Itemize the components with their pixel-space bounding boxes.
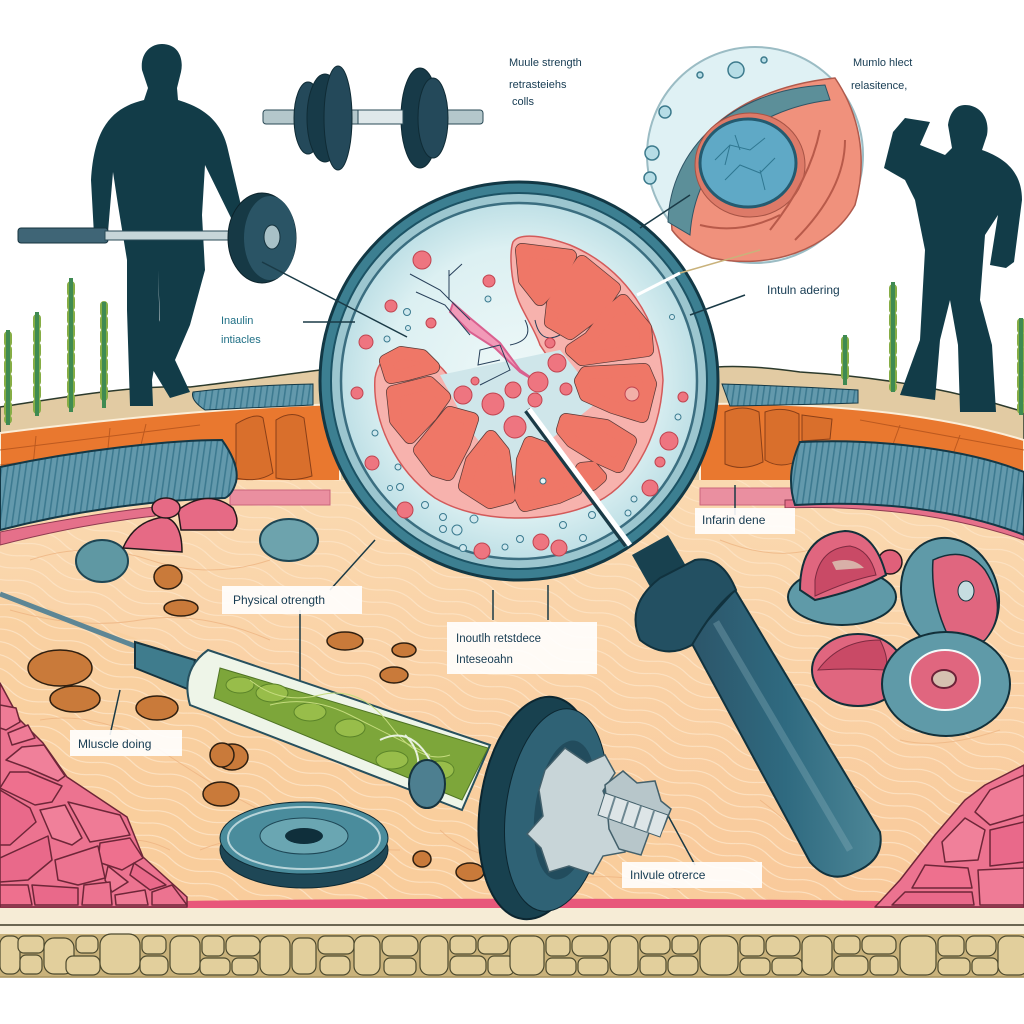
label: Insulin adaring: Intuln adering — [767, 283, 840, 297]
magnifying glass — [320, 182, 718, 580]
label: Muscle blast resistance: Mumlo hlect — [853, 57, 912, 69]
blue-gray fibre bundle left — [0, 384, 313, 530]
label: Physical strength — [222, 586, 362, 614]
kidney section — [375, 236, 663, 518]
label: Muscle blast resistance — [851, 57, 912, 92]
stone strip — [0, 908, 1024, 978]
dumbbell — [263, 66, 483, 170]
layered tissue background — [0, 366, 1024, 920]
barbell — [18, 193, 296, 283]
label: Insulin resistance — [447, 622, 597, 674]
grass stalks — [8, 278, 1021, 425]
label: Insulin intoacles: Inaulin — [221, 315, 253, 327]
label: Insulin resistance: Inteseoahn — [456, 654, 513, 666]
rings right — [788, 525, 1014, 736]
label: Muscle strength: retrasteiehs — [509, 79, 567, 91]
syringe — [0, 594, 490, 810]
leader lines — [110, 195, 760, 865]
orange fibre bundles — [236, 408, 832, 480]
label: Insulin dens — [695, 508, 795, 534]
label: Muscle strength: colls — [512, 96, 535, 108]
vein network — [410, 264, 560, 385]
label: Insulin stress — [622, 862, 762, 888]
silhouette: flexing man — [884, 105, 1022, 412]
label: Physical strength: Physical otrength — [233, 593, 325, 607]
label: Insulin dens: Infarin dene — [702, 513, 766, 527]
label: Insulin stress: Inlvule otrerce — [630, 868, 706, 882]
pink muscle tissue left — [0, 683, 187, 907]
label: Muscle doing: Mluscle doing — [78, 737, 151, 751]
callout: cell close-up — [644, 47, 863, 263]
pink base line — [0, 899, 1024, 910]
lens glare — [527, 273, 680, 545]
label: Muscle strength — [509, 57, 582, 108]
pebbles and bean shapes — [28, 498, 484, 881]
lens nodes — [351, 251, 688, 559]
label: Insulin intoacles — [221, 315, 261, 346]
label: Insulin intoacles: intiacles — [221, 334, 261, 346]
label: Muscle doing — [70, 730, 182, 756]
blue-gray fibre bundle right — [722, 384, 1024, 535]
label: Insulin resistance: Inoutlh retstdece — [456, 633, 541, 645]
pink muscle tissue right — [875, 765, 1024, 907]
label: Muscle strength: Muule strength — [509, 57, 582, 69]
label: Muscle blast resistance: relasitence, — [851, 80, 907, 92]
pink brick strip — [0, 507, 155, 545]
gear weight — [465, 689, 671, 927]
weight plate flat — [220, 802, 388, 888]
silhouette: man with barbell — [91, 44, 243, 406]
magnifier handle — [632, 535, 881, 877]
